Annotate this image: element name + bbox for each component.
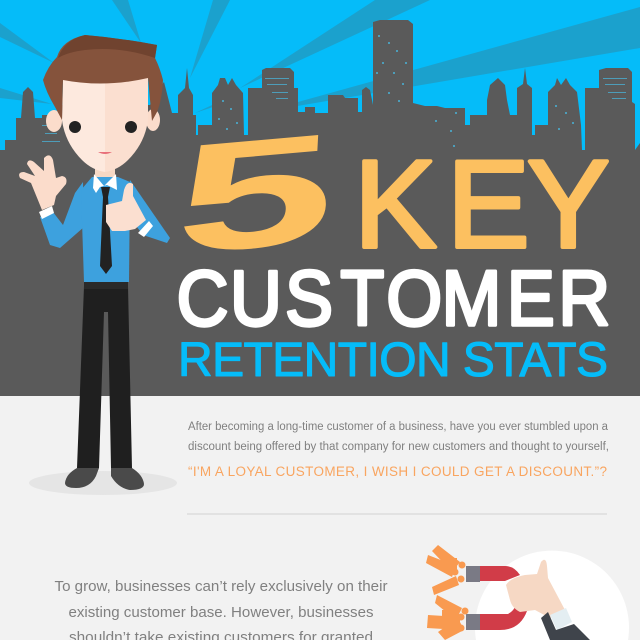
left arm	[40, 182, 84, 248]
skyline silhouette	[0, 20, 640, 396]
orange quote: “I'M A LOYAL CUSTOMER, I WISH I COULD GET A DISCOUNT.”?	[188, 464, 607, 479]
shirt cuff	[550, 608, 572, 630]
mouth	[98, 152, 112, 154]
title: CUSTOMER: CUSTOMER	[177, 254, 610, 342]
hair	[43, 35, 163, 121]
character: businessman	[19, 35, 177, 495]
illustration: magnet attracting customers	[426, 545, 629, 640]
shoes	[65, 468, 144, 490]
raised hand	[19, 155, 67, 210]
hero panel: city skyline	[0, 0, 640, 396]
second paragraph: existing customer base. However, businesses	[68, 605, 374, 621]
title: RETENTION STATS: RETENTION STATS	[178, 334, 608, 387]
divider	[187, 513, 607, 515]
white circle	[475, 551, 629, 640]
thumbs-up hand	[106, 183, 146, 231]
building windows	[42, 35, 627, 147]
suit sleeve	[541, 612, 590, 640]
neck	[95, 160, 115, 184]
sun rays	[0, 0, 640, 113]
tie	[100, 187, 112, 274]
magnet	[466, 566, 527, 630]
intro paragraph: discount being offered by that company for new customers and thought to yourself,	[188, 441, 609, 453]
eyes	[69, 121, 137, 133]
intro paragraph	[188, 421, 609, 453]
belt	[84, 281, 128, 289]
orange customers	[426, 545, 468, 640]
sky	[0, 0, 640, 200]
title: 5: 5	[172, 99, 339, 287]
second paragraph: To grow, businesses can’t rely exclusively on their	[54, 579, 388, 595]
face	[62, 78, 105, 172]
collar	[93, 174, 117, 193]
second paragraph	[54, 579, 388, 640]
shirt	[81, 177, 130, 282]
title: KEY: KEY	[354, 136, 610, 274]
raised hand cuff	[39, 206, 54, 219]
ground shadow	[29, 471, 177, 495]
trousers	[77, 286, 132, 468]
hair shadow	[58, 35, 157, 58]
right arm	[128, 180, 170, 243]
thumbs-up hand	[506, 560, 565, 618]
ears	[46, 109, 160, 132]
intro paragraph: After becoming a long-time customer of a business, have you ever stumbled upon a	[188, 421, 609, 433]
thumbs-up cuff	[138, 221, 153, 237]
